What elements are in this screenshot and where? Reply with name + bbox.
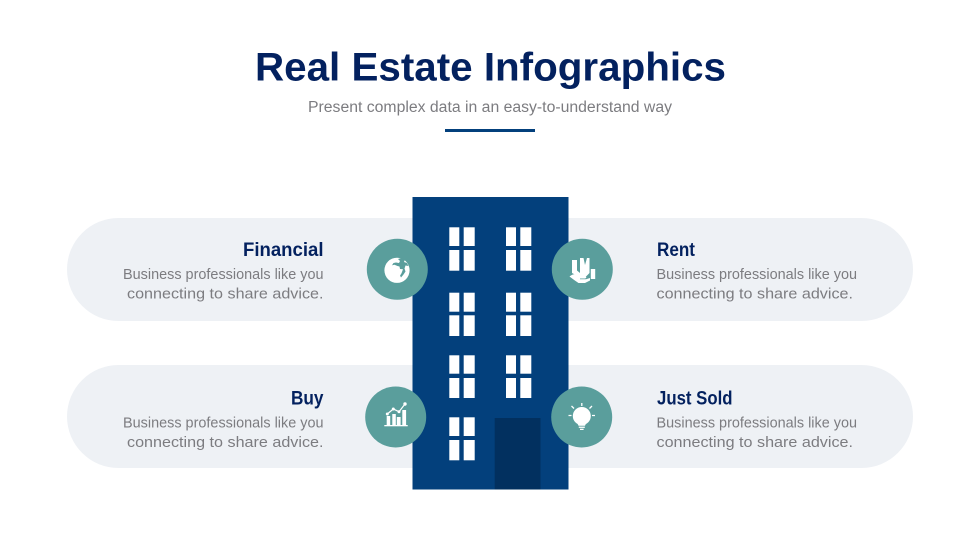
text: just sold description: Business professionals like you (656, 416, 857, 432)
text: rent description: Business professionals like you (656, 267, 857, 283)
icon: growth chart (365, 386, 426, 448)
subtitle: Present complex data in an easy-to-understand way (308, 99, 672, 116)
door (495, 418, 540, 490)
panel: just sold (493, 365, 913, 468)
heading: financial: Financial (243, 240, 324, 261)
windows (449, 227, 531, 460)
building (412, 197, 568, 490)
heading: rent: Rent (657, 240, 696, 261)
title underline (445, 129, 535, 132)
text: buy description: connecting to share advice. (127, 435, 324, 451)
panel: buy (67, 365, 487, 468)
icon: light bulb (551, 386, 612, 448)
heading: buy: Buy (291, 388, 324, 410)
text: buy description: Business professionals like you (123, 416, 324, 432)
text: rent description: connecting to share advice. (656, 286, 853, 302)
text: financial description: Business professionals like you (123, 267, 324, 283)
panel: financial (67, 218, 487, 321)
panel: rent (493, 218, 913, 321)
title: Real Estate Infographics (255, 46, 726, 90)
icon: hand holding buildings (552, 239, 613, 300)
text: financial description: connecting to share advice. (127, 286, 324, 302)
text: just sold description: connecting to share advice. (656, 435, 853, 451)
heading: just sold: Just Sold (657, 388, 732, 410)
icon: globe (367, 239, 428, 300)
